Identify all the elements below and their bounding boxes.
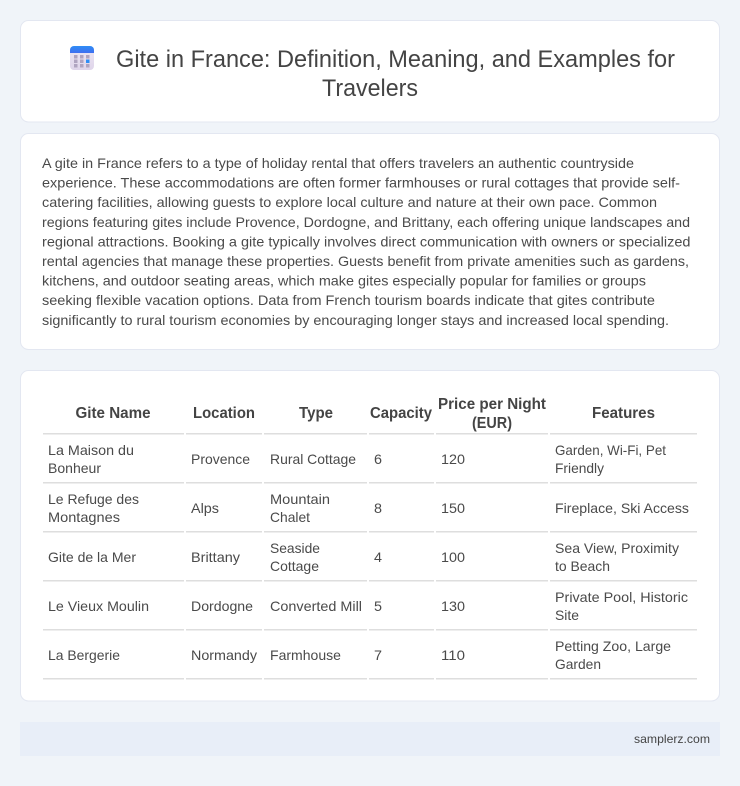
table row: Le Vieux Moulin [48,589,688,623]
table header row: Type [299,405,333,422]
panel: header [20,20,720,122]
table row: La Maison du Bonheur: Provence [191,451,250,467]
text block: description paragraph: regions featuring gites include Provence, Dordogne, and Brittany, each offering unique landscapes and [42,214,690,230]
text block: description paragraph: kitchens, and outdoor seating areas, which make gites especially popular for families or groups [42,273,646,289]
table row: Le Vieux Moulin: Le Vieux Moulin [48,598,149,614]
table row: Gite de la Mer: Cottage [270,558,319,574]
table row: Gite de la Mer: 100 [441,549,465,565]
table row: La Maison du Bonheur: Rural Cottage [270,451,356,467]
table row: Le Refuge des Montagnes: 150 [441,500,465,516]
text block: description paragraph: significantly to rural tourism economies by encouraging longer stays and increased local spending. [42,312,669,328]
text block: description paragraph: catering facilities, allowing guests to explore local culture and nature at their own pace. Common [42,194,657,210]
table row: Gite de la Mer: Sea View, Proximity [555,540,679,556]
table header row: Location [193,405,255,422]
table row: Le Refuge des Montagnes: Le Refuge des [48,491,139,507]
table row: Le Vieux Moulin: Site [555,607,579,623]
table row: Le Refuge des Montagnes: Alps [191,500,219,516]
table row: La Bergerie: 7 [374,647,382,663]
table row: Le Vieux Moulin: 130 [441,598,465,614]
text block: description paragraph: regional attractions. Booking a gite typically involves direct communication with owners or specialized [42,233,690,249]
table row: La Bergerie: Garden [555,656,601,672]
table header row: Capacity [370,405,432,422]
table row: La Maison du Bonheur: Bonheur [48,460,101,476]
table row: La Bergerie: 110 [441,647,465,663]
table row: La Bergerie: La Bergerie [48,647,120,663]
title [116,46,675,102]
table row: Le Vieux Moulin: Converted Mill [270,598,362,614]
table row: La Bergerie: Normandy [191,647,257,663]
table header row: (EUR) [472,415,512,432]
table row: La Maison du Bonheur [48,442,666,476]
table row: Le Refuge des Montagnes: Montagnes [48,509,120,525]
panel: gite table [20,370,720,701]
table header row: Features [592,405,655,422]
table header row [76,396,655,432]
title: Travelers [322,75,418,102]
footer source text: samplerz.com [634,732,710,746]
table row: Gite de la Mer: Seaside [270,540,320,556]
table row: La Maison du Bonheur: Friendly [555,460,604,476]
text block: description paragraph: rental agencies that manage these properties. Guests benefit from private amenities such as gardens, [42,253,689,269]
table row: La Maison du Bonheur: Garden, Wi-Fi, Pet [555,442,666,458]
text block: description paragraph: experience. These accommodations are often former farmhouses or rural cottages that provide self- [42,175,680,191]
table row: Gite de la Mer: 4 [374,549,382,565]
table row: Le Refuge des Montagnes: 8 [374,500,382,516]
table row: Gite de la Mer: Brittany [191,549,240,565]
table row: Le Refuge des Montagnes: Chalet [270,509,310,525]
table row: Le Vieux Moulin: Dordogne [191,598,253,614]
table row: La Bergerie [48,638,671,672]
table row: La Maison du Bonheur: La Maison du [48,442,134,458]
icon: calendar [70,46,94,70]
panel: description [20,134,720,350]
table row: La Maison du Bonheur: 120 [441,451,465,467]
table row: Gite de la Mer: Gite de la Mer [48,549,136,565]
table row: Gite de la Mer: to Beach [555,558,610,574]
table row: Le Refuge des Montagnes: Mountain [270,491,330,507]
table row: La Bergerie: Petting Zoo, Large [555,638,671,654]
table row: Gite de la Mer [48,540,679,574]
footer [20,722,720,756]
text block: description paragraph [42,155,690,328]
table row: La Bergerie: Farmhouse [270,647,341,663]
title: Gite in France: Definition, Meaning, and Examples for [116,46,675,73]
table row: Le Vieux Moulin: Private Pool, Historic [555,589,688,605]
table row: Le Refuge des Montagnes [48,491,689,525]
table header row: Price per Night [438,396,547,413]
table header row: Gite Name [76,405,151,422]
text block: description paragraph: seeking flexible vacation options. Data from French tourism boards indicate that gites contribute [42,292,655,308]
table row: Le Vieux Moulin: 5 [374,598,382,614]
text block: description paragraph: A gite in France refers to a type of holiday rental that offers travelers an authentic countryside [42,155,634,171]
table row: La Maison du Bonheur: 6 [374,451,382,467]
table row: Le Refuge des Montagnes: Fireplace, Ski Access [555,500,689,516]
